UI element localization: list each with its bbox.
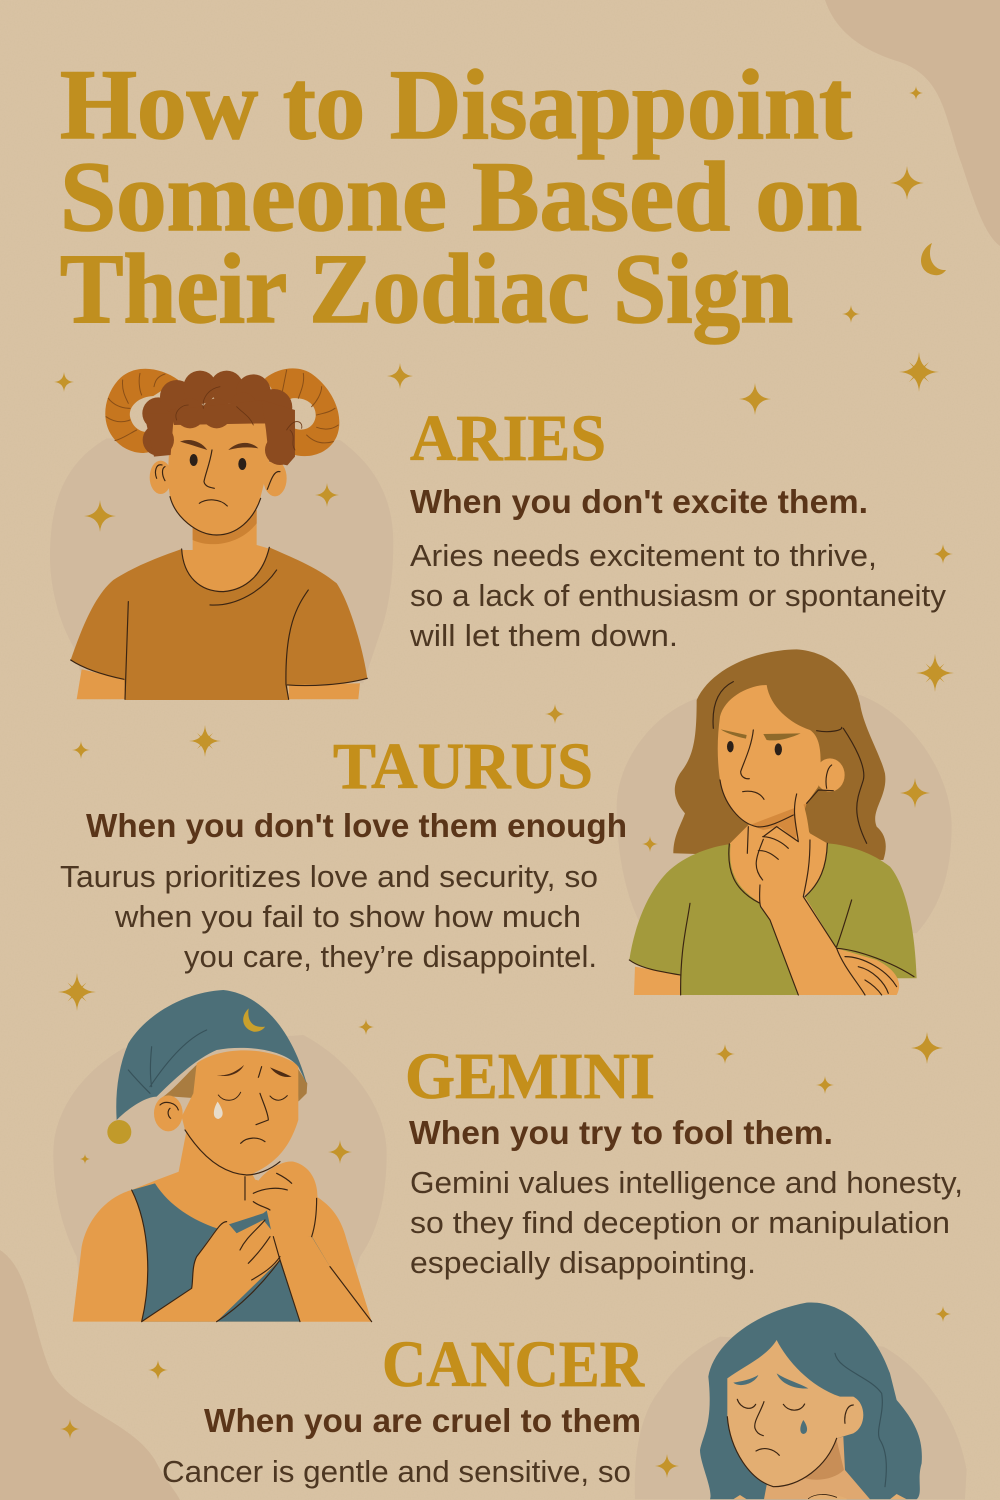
text block: Taurus: when you fail to show how much: [114, 899, 581, 934]
text block: Gemini: especially disappointing.: [410, 1245, 756, 1280]
Cancer stars: [655, 1306, 951, 1478]
heading: Cancer: CANCER: [382, 1328, 645, 1401]
background blob: bottom left: [0, 1250, 180, 1500]
text block: Aries: will let them down.: [409, 618, 678, 653]
title: How to Disappoint: [60, 49, 852, 160]
subheading: Taurus: When you don't love them enough: [86, 807, 627, 844]
illustration: Aries: [50, 368, 393, 700]
text block: Gemini: so they find deception or manipulation: [410, 1205, 950, 1240]
text block: Gemini: Gemini values intelligence and honesty,: [410, 1165, 963, 1200]
illustration: Taurus: [617, 649, 952, 995]
heading: Gemini: GEMINI: [405, 1040, 655, 1113]
background blob: top right: [825, 0, 1000, 246]
text block: Taurus: you care, they’re disappointel.: [184, 939, 597, 974]
text block: Cancer: Cancer is gentle and sensitive, so: [162, 1454, 631, 1489]
title: Someone Based on: [60, 141, 862, 252]
text block: Gemini: [410, 1165, 963, 1280]
subheading: Gemini: When you try to fool them.: [409, 1114, 833, 1151]
illustration: Gemini: [53, 990, 387, 1322]
heading: Aries: ARIES: [410, 402, 606, 475]
text block: Aries: [409, 538, 946, 653]
title: Their Zodiac Sign: [60, 233, 793, 344]
text block: Aries: so a lack of enthusiasm or spontaneity: [410, 578, 946, 613]
subheading: Aries: When you don't excite them.: [410, 483, 868, 520]
title: [60, 49, 862, 344]
Taurus stars: [642, 778, 930, 852]
Aries stars: [84, 483, 339, 532]
text block: Aries: Aries needs excitement to thrive,: [410, 538, 877, 573]
subheading: Cancer: When you are cruel to them: [204, 1402, 641, 1439]
illustration: Cancer: [635, 1302, 967, 1499]
text block: Taurus: Taurus prioritizes love and security, so: [60, 859, 598, 894]
Gemini stars: [80, 1140, 352, 1164]
text block: Taurus: [60, 859, 598, 974]
heading: Taurus: TAURUS: [333, 730, 593, 803]
icon: crescent moon: [921, 243, 946, 275]
